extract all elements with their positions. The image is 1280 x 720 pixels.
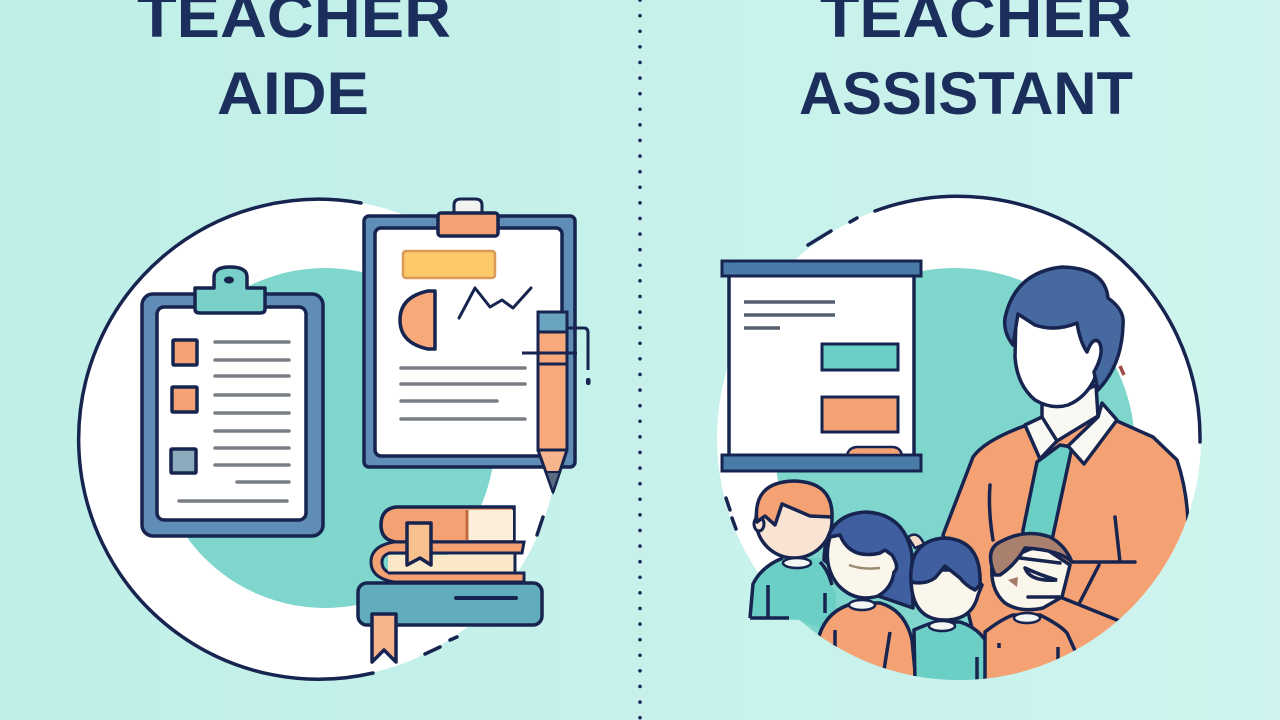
- icon: stack of books: [358, 507, 542, 662]
- heading: teacher assistant: ASSISTANT: [799, 60, 1133, 127]
- figure: child right with teacher hand: [985, 533, 1077, 682]
- circle backdrop: [717, 196, 1201, 682]
- icon: right clipboard report: [364, 199, 575, 467]
- icon: pencil: [522, 312, 590, 492]
- figure: teacher: [943, 267, 1188, 680]
- figure: child center: [908, 535, 998, 682]
- circle backdrop: [78, 199, 558, 679]
- icon: presentation board: [722, 261, 921, 471]
- heading: teacher aide: AIDE: [217, 60, 369, 127]
- figure: child far left: [750, 481, 836, 635]
- panel: teacher assistant: [717, 0, 1201, 682]
- panel: teacher aide: [78, 0, 590, 679]
- heading: teacher assistant: [799, 0, 1133, 127]
- icon: left clipboard checklist: [142, 267, 323, 536]
- heading: teacher aide: [137, 0, 451, 127]
- figure: child with blue hair: [815, 512, 916, 682]
